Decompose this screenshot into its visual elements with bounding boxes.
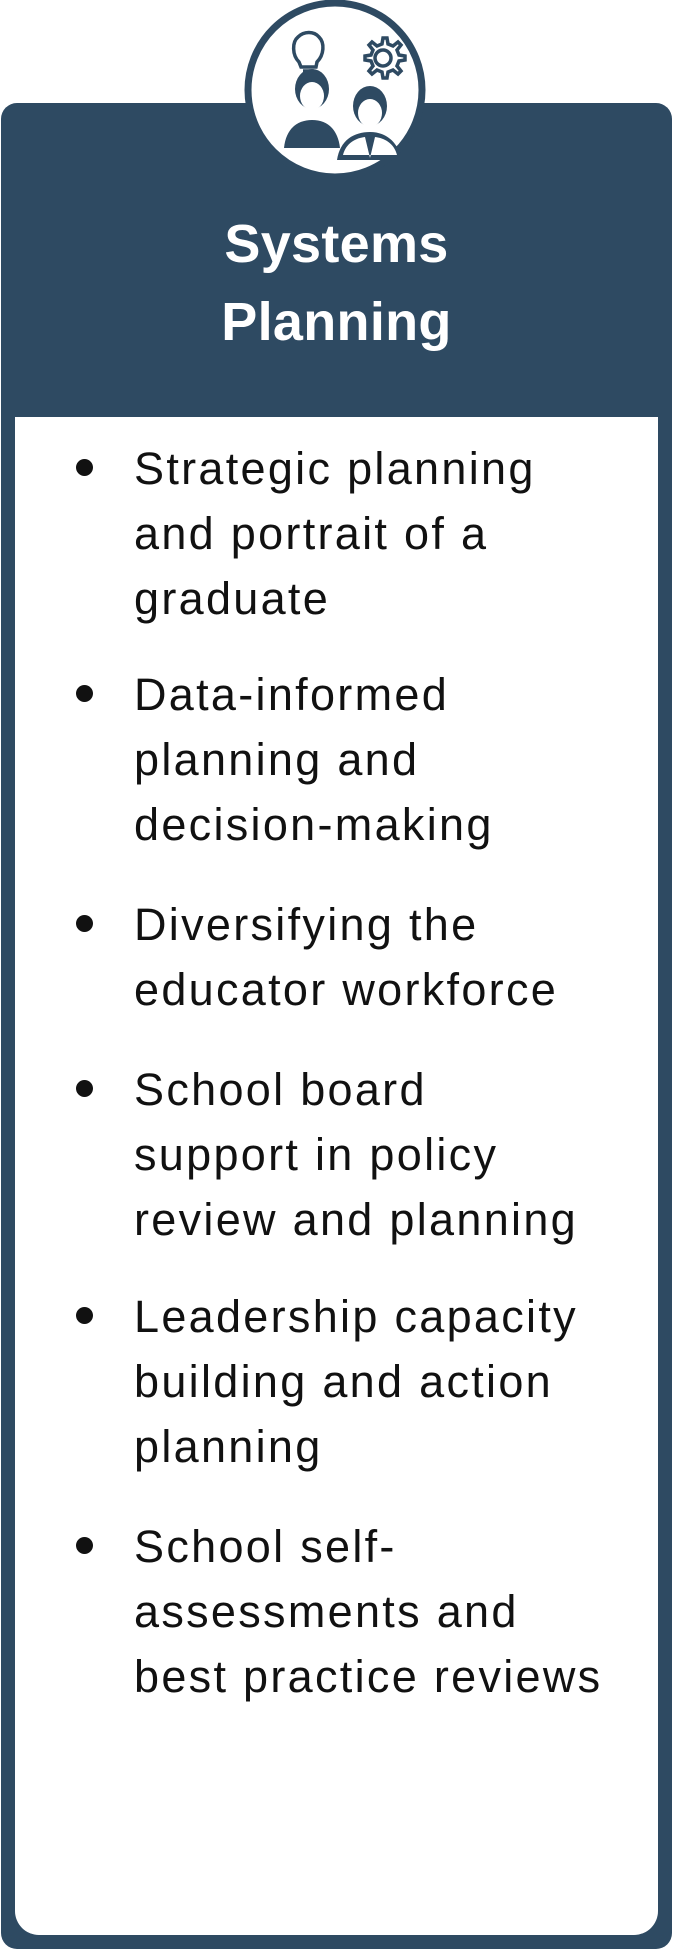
title: Planning: [221, 292, 452, 352]
bullet list: planning: [134, 1421, 323, 1472]
bullet 2: [76, 669, 494, 850]
icon: people with lightbulb and gear: [244, 0, 426, 174]
title: [221, 214, 452, 352]
bullet list: best practice reviews: [134, 1651, 602, 1702]
bullet 4: [76, 1064, 578, 1245]
bullet list: building and action: [134, 1356, 553, 1407]
bullet list: Strategic planning: [134, 443, 536, 494]
bullet list: decision-making: [134, 799, 494, 850]
inner white body: [15, 417, 658, 1935]
bullet list: review and planning: [134, 1194, 578, 1245]
bullet 1: [76, 443, 536, 624]
bullet list: and portrait of a: [134, 508, 488, 559]
bullet list: planning and: [134, 734, 419, 785]
bullet list: graduate: [134, 573, 330, 624]
bullet list: support in policy: [134, 1129, 498, 1180]
bullet list: [76, 443, 602, 1702]
bullet list: Diversifying the: [134, 899, 478, 950]
bullet list: School board: [134, 1064, 427, 1115]
bullet list: Data-informed: [134, 669, 449, 720]
bullet 3: [76, 899, 558, 1015]
bullet list: School self-: [134, 1521, 397, 1572]
title: Systems: [224, 214, 449, 274]
bullet 6: [76, 1521, 602, 1702]
bullet list: assessments and: [134, 1586, 519, 1637]
bullet list: Leadership capacity: [134, 1291, 578, 1342]
bullet list: educator workforce: [134, 964, 558, 1015]
bullet 5: [76, 1291, 578, 1472]
